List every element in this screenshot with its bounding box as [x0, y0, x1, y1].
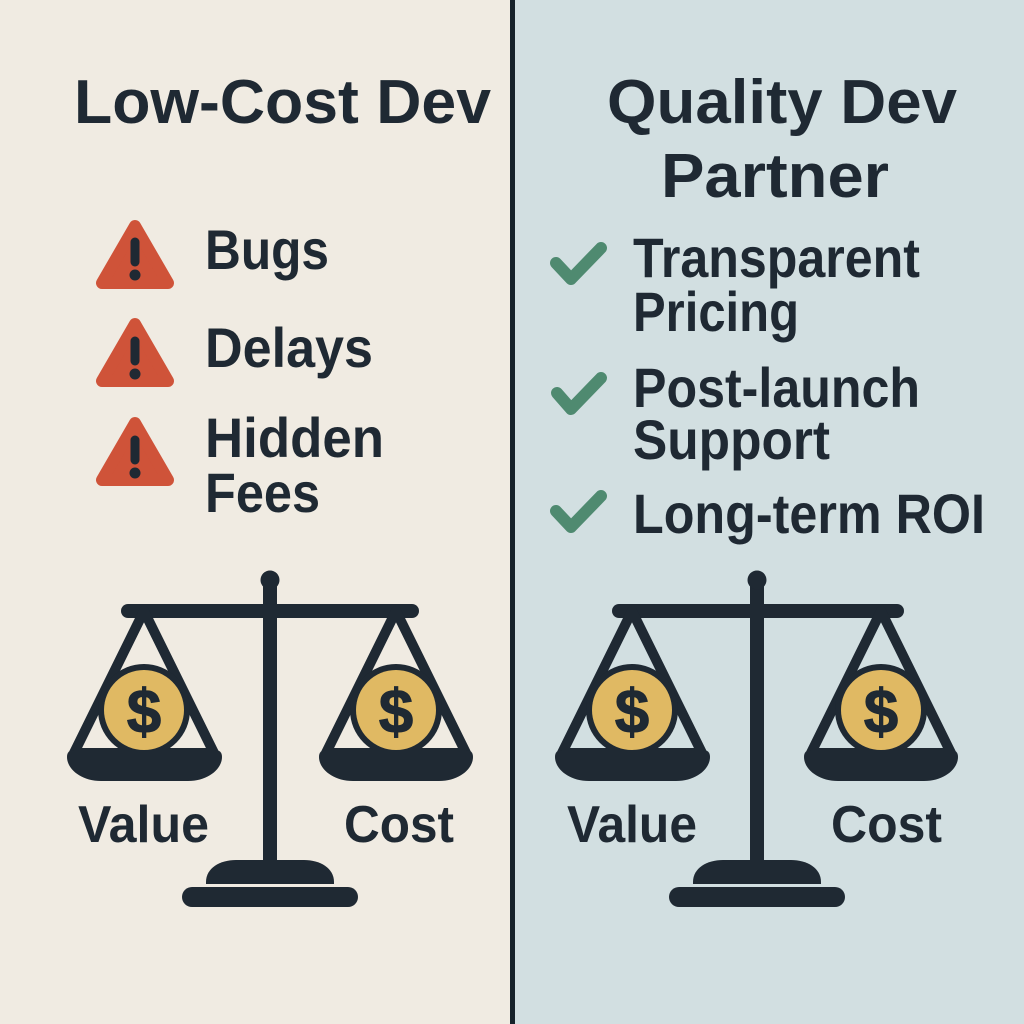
icon: check mark 3	[556, 496, 601, 527]
label: Long-term ROI: Long-term ROI	[633, 482, 985, 545]
title: Quality Dev Partner: Quality Dev	[607, 68, 958, 137]
title: Quality Dev Partner: Partner	[661, 142, 889, 211]
right pan with coin	[804, 611, 958, 781]
label: Post-launch Support: Support	[633, 408, 830, 471]
right pan with coin	[319, 611, 473, 781]
scale post and beam	[612, 570, 904, 870]
label: Transparent Pricing: Transparent	[633, 226, 920, 289]
icon: check mark 1	[556, 248, 601, 279]
icon: warning triangle 3	[102, 423, 168, 480]
right pan with coin: $	[379, 678, 413, 747]
label: Cost: Cost	[831, 796, 942, 854]
title: Low-Cost Dev: Low-Cost Dev	[74, 68, 492, 137]
left pan with coin	[555, 611, 710, 781]
label: Transparent Pricing: Pricing	[633, 280, 799, 343]
label: Value: Value	[78, 796, 209, 854]
risk list	[102, 218, 384, 524]
label: Hidden Fees	[205, 406, 384, 524]
title: Quality Dev Partner	[607, 68, 958, 211]
panel: quality dev partner	[515, 0, 1024, 1024]
scale base	[182, 860, 358, 907]
panel: low-cost dev	[0, 0, 510, 1024]
left pan with coin	[67, 611, 222, 781]
label: Post-launch Support	[633, 356, 920, 471]
left pan with coin: $	[615, 678, 649, 747]
label: Hidden Fees: Hidden	[205, 406, 384, 469]
icon: warning triangle 1	[102, 226, 168, 283]
balance scale: low-cost	[67, 570, 473, 907]
benefit list	[556, 226, 985, 545]
icon: warning triangle 2	[102, 324, 168, 381]
balance scale: quality	[555, 570, 958, 907]
icon: check mark 2	[557, 378, 601, 409]
scale post and beam	[121, 570, 419, 870]
label: Value: Value	[567, 796, 697, 854]
label: Cost: Cost	[344, 796, 454, 854]
label: Delays: Delays	[205, 316, 373, 379]
label: Bugs: Bugs	[205, 218, 329, 281]
label: Hidden Fees: Fees	[205, 461, 320, 524]
left pan with coin: $	[127, 678, 161, 747]
right pan with coin: $	[864, 678, 898, 747]
label: Post-launch Support: Post-launch	[633, 356, 920, 419]
scale base	[669, 860, 845, 907]
label: Transparent Pricing	[633, 226, 920, 343]
